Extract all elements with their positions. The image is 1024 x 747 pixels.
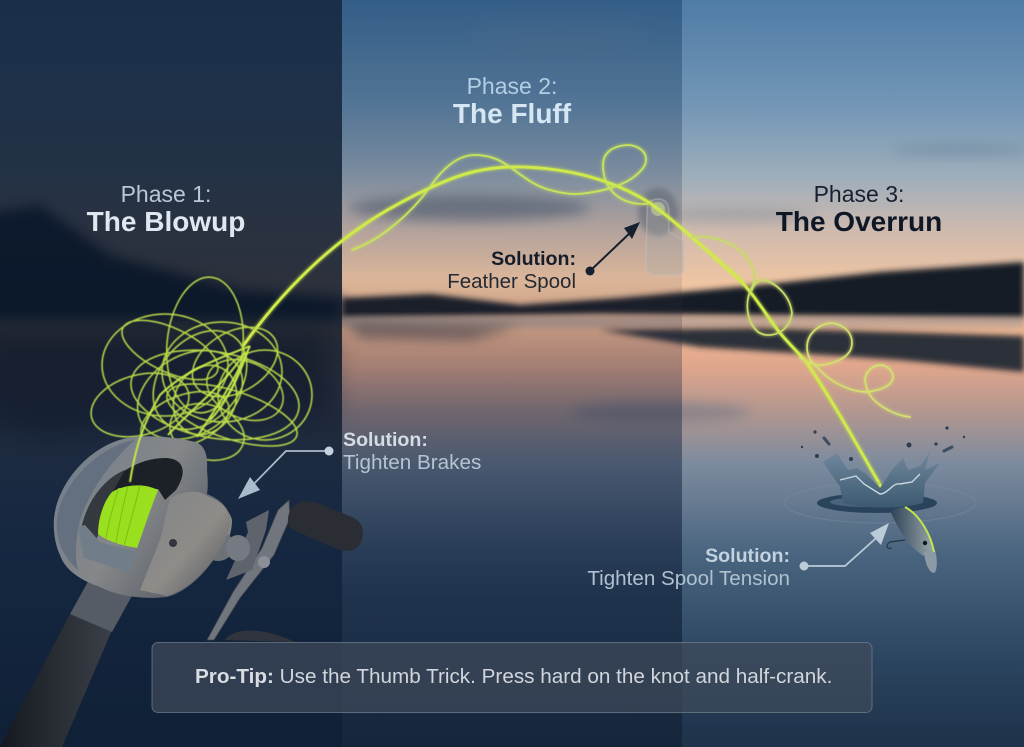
heading: phase 1 xyxy=(87,181,245,237)
handle knob xyxy=(288,501,363,551)
panel: phase 2 shade xyxy=(342,0,682,747)
callout: tighten brakes: Solution: xyxy=(343,429,428,451)
rod grip xyxy=(0,614,112,747)
fishing line: bird's nest tangle xyxy=(84,274,312,469)
callout: feather spool xyxy=(447,222,640,293)
spool with green line xyxy=(98,485,158,548)
frame opening xyxy=(95,458,183,530)
fishing line: fluff loops xyxy=(352,145,647,250)
heading: phase 2: The Fluff xyxy=(453,98,572,129)
callout: feather spool: Solution: xyxy=(491,248,576,270)
body xyxy=(54,436,230,598)
fishing line: main cast arc xyxy=(243,145,910,490)
bar under spool xyxy=(78,525,137,572)
rod ferrule xyxy=(70,578,134,632)
panel: phase 1 shade xyxy=(0,0,342,747)
heading: phase 2 xyxy=(453,73,572,129)
star drag xyxy=(226,510,269,580)
right frame xyxy=(140,492,230,596)
handle arm xyxy=(207,500,290,640)
fishing line: strands rising from spool into tangle xyxy=(130,346,250,482)
side hub xyxy=(200,500,232,565)
callout: tighten spool tension xyxy=(587,523,889,590)
heading: phase 3 xyxy=(776,181,942,237)
callout: pro-tip bar: Pro-Tip: Use the Thumb Trick. Press hard on the knot and half-crank. xyxy=(195,665,832,688)
heading: phase 1: Phase 1: xyxy=(121,181,211,207)
heading: phase 3: The Overrun xyxy=(776,206,942,237)
callout: tighten spool tension: Solution: xyxy=(705,545,790,567)
icon: thumb on spool xyxy=(638,188,684,275)
callout: tighten brakes xyxy=(238,429,481,499)
icon: lure xyxy=(887,507,937,573)
callout: tighten spool tension: Tighten Spool Tension xyxy=(587,567,790,590)
callout: tighten brakes: Tighten Brakes xyxy=(343,451,481,474)
callout: pro-tip bar xyxy=(152,642,872,712)
callout: feather spool: Feather Spool xyxy=(447,270,576,293)
lump behind panel xyxy=(225,630,295,642)
icon: baitcasting reel xyxy=(0,436,363,747)
side plate xyxy=(57,440,135,570)
heading: phase 2: Phase 2: xyxy=(467,73,557,99)
heading: phase 3: Phase 3: xyxy=(814,181,904,207)
heading: phase 1: The Blowup xyxy=(87,206,245,237)
icon: water splash xyxy=(784,426,976,523)
fishing line: overrun loops xyxy=(692,237,792,335)
